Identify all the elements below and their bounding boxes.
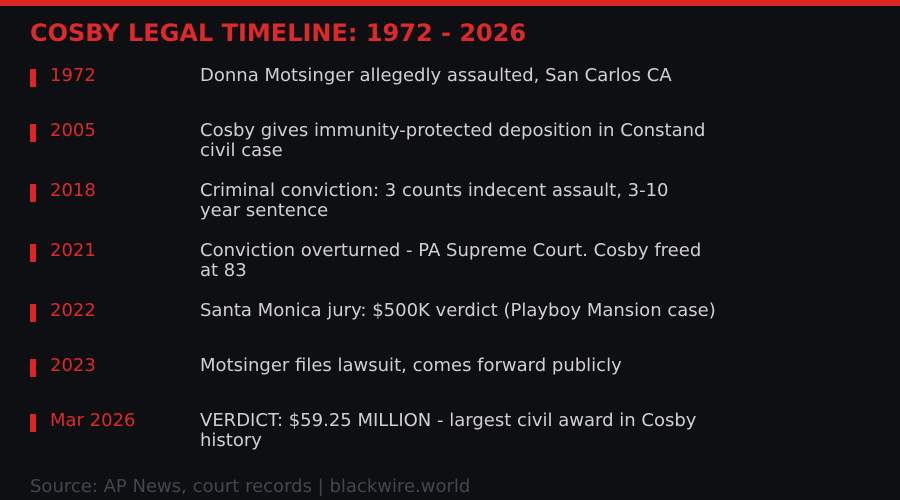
row: Mar 2026: VERDICT: $59.25 MILLION - largest civil award in Cosby history bbox=[200, 410, 696, 451]
row: 1972: 1972 bbox=[50, 65, 96, 86]
row: 2022: 2022 bbox=[50, 300, 96, 321]
row: 2005: 2005 bbox=[50, 120, 96, 141]
row: 2021: 2021 bbox=[50, 240, 96, 261]
row: 2021: Conviction overturned - PA Supreme Court. Cosby freed at 83 bbox=[200, 240, 701, 281]
row: 2023 bbox=[30, 355, 622, 377]
row: 2022: Santa Monica jury: $500K verdict (Playboy Mansion case) bbox=[200, 300, 716, 321]
row: 2005: Cosby gives immunity-protected deposition in Constand civil case bbox=[200, 120, 705, 161]
title: COSBY LEGAL TIMELINE: 1972 - 2026 bbox=[30, 19, 526, 47]
row: 2023: Motsinger files lawsuit, comes forward publicly bbox=[200, 355, 622, 376]
row: 2023: 2023 bbox=[50, 355, 96, 376]
row: 1972: Donna Motsinger allegedly assaulted, San Carlos CA bbox=[200, 65, 672, 86]
row: 2018: Criminal conviction: 3 counts indecent assault, 3-10 year sentence bbox=[200, 180, 669, 221]
row: Mar 2026: Mar 2026 bbox=[50, 410, 136, 431]
source: Source: AP News, court records | blackwire.world bbox=[30, 476, 470, 497]
row: 2018: 2018 bbox=[50, 180, 96, 201]
